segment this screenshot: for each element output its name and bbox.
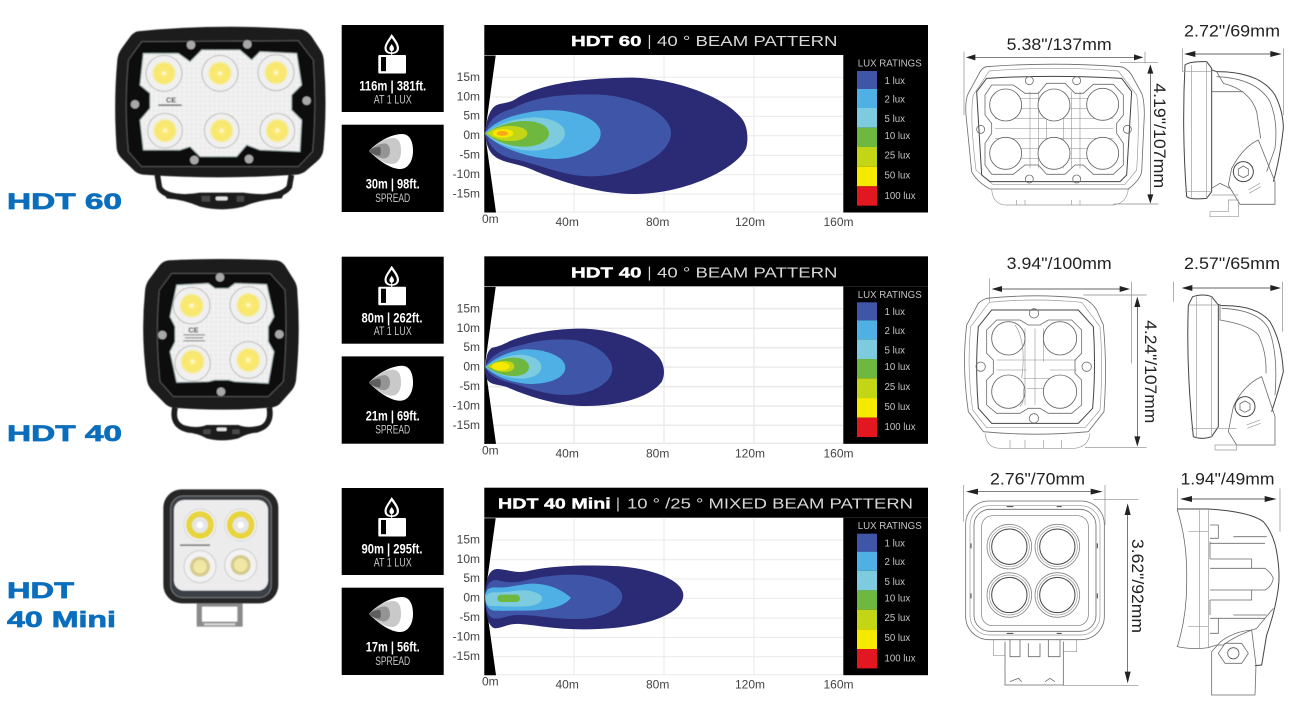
spread card: SPREAD [375,424,410,436]
distance card [342,25,444,112]
chart header: HDT 40 [571,264,642,281]
x axis labels: 160m [824,678,854,692]
dimensions: HDT 40 Mini side: 1.94"/49mm [1180,470,1274,488]
legend: lux ratings: 25 lux [884,150,910,162]
light source wedge [484,287,496,444]
spread card [342,356,444,444]
legend: lux ratings [843,286,928,444]
spread card: SPREAD [375,193,410,205]
dimensions: HDT 60 front: 5.38"/137mm [1007,35,1112,54]
spread card [342,588,444,675]
product name: HDT 60: HDT 60 [7,189,122,214]
legend: lux ratings: 1 lux [884,307,905,318]
distance card: 90m | 295ft. [362,542,422,557]
beam pattern [485,78,747,194]
chart header: HDT 40 Mini [498,495,611,512]
line drawing [965,278,1147,448]
x axis labels: 160m [824,446,854,460]
distance card: 80m | 262ft. [362,310,422,325]
y axis labels: 0m [463,359,480,373]
product name: HDT 40 Mini: HDT [7,578,75,603]
legend: lux ratings: 1 lux [884,76,905,87]
legend: lux ratings: 100 lux [884,191,916,202]
legend: lux ratings: 50 lux [884,402,910,413]
x axis labels: 80m [646,215,669,229]
x axis labels [482,443,854,460]
line drawing [964,52,1158,205]
legend: lux ratings: 100 lux [884,654,916,665]
x axis labels: 120m [735,215,765,229]
spread card: SPREAD [375,656,410,668]
line drawing [963,485,1138,686]
y axis labels: -5m [459,610,480,624]
x axis labels: 0m [482,212,499,226]
icon: spread [369,597,413,632]
legend: lux ratings: 2 lux [884,557,905,568]
beam pattern [485,565,683,629]
x axis labels: 40m [556,678,579,692]
chart header: 10 ° /25 ° MIXED BEAM PATTERN [627,495,913,512]
x axis labels: 160m [824,215,854,229]
dimensions: HDT 60 side: 2.72"/69mm [1184,22,1280,40]
icon: spread [369,366,413,401]
stats: HDT 60 [342,25,444,212]
distance card: AT 1 LUX [374,558,412,570]
dimensions: HDT 60 side [1182,22,1283,217]
dimensions: HDT 40 Mini front: 3.62"/92mm [1128,539,1147,633]
light source wedge [484,518,496,675]
y axis labels: -10m [453,398,480,412]
dimensions: HDT 60 front [964,35,1169,205]
dimensions: HDT 40 front: 3.94"/100mm [1007,254,1112,273]
x axis labels [482,675,854,692]
y axis labels [453,533,480,663]
product photo: HDT 40: CE [188,325,199,334]
distance card: 116m | 381ft. [359,79,426,94]
icon: candle [378,497,406,536]
legend: lux ratings: 50 lux [884,170,910,182]
legend: lux ratings: LUX RATINGS [858,58,922,70]
beam chart: HDT 40 [453,256,928,460]
dimensions: HDT 40 front: 4.24"/107mm [1141,320,1160,423]
x axis labels: 120m [735,678,765,692]
beam chart: HDT 40 Mini [453,488,928,692]
spread card: 30m | 98ft. [366,177,420,192]
product photo: HDT 60 [115,27,326,209]
y axis labels: -10m [453,630,480,644]
legend: lux ratings: 2 lux [884,94,905,106]
legend: lux ratings: 25 lux [884,382,910,393]
legend: lux ratings: 5 lux [884,114,905,125]
y axis labels [453,70,480,200]
y axis labels: -5m [459,379,480,393]
dimensions: HDT 40 Mini front [963,470,1147,686]
legend: lux ratings: 50 lux [884,633,910,644]
x axis labels: 80m [646,678,669,692]
legend: lux ratings: 10 lux [884,362,910,373]
chart header: 40 ° BEAM PATTERN [657,264,838,281]
chart header: | [616,495,620,512]
legend: lux ratings [843,55,928,212]
stats: HDT 40 Mini [342,488,444,675]
x axis labels: 120m [735,446,765,460]
legend: lux ratings: 1 lux [884,539,905,550]
y axis labels: 5m [463,571,480,585]
y axis labels: 5m [463,108,480,122]
spread card [342,125,444,212]
y axis labels: 15m [457,70,480,84]
legend: lux ratings [843,518,928,675]
icon: candle [378,34,406,74]
stats: HDT 40 [342,257,444,444]
dimensions: HDT 40 Mini side [1177,470,1280,695]
dimensions: HDT 60 front: 4.19"/107mm [1150,83,1169,188]
distance card [342,488,444,575]
x axis labels [482,212,854,229]
product photo: HDT 40 Mini [163,489,278,627]
y axis labels: 15m [457,533,480,547]
product photo: HDT 60: CE [166,96,176,105]
y axis labels: -15m [453,418,480,432]
chart header: 40 ° BEAM PATTERN [657,33,838,50]
y axis labels: -15m [453,649,480,663]
y axis labels: 10m [457,90,480,104]
legend: lux ratings: 10 lux [884,594,910,605]
chart header [484,488,928,518]
chart header [484,256,928,286]
x axis labels: 40m [556,215,579,229]
x axis labels: 80m [646,446,669,460]
beam pattern [485,329,664,406]
dimensions: HDT 40 side [1173,254,1283,450]
dimensions: HDT 40 Mini front: 2.76"/70mm [990,470,1085,488]
dimensions: HDT 40 side: 2.57"/65mm [1184,254,1280,273]
chart header [484,25,928,55]
line drawing [1173,282,1283,450]
legend: lux ratings: 2 lux [884,326,905,337]
x axis labels: 0m [482,675,499,689]
legend: lux ratings: 10 lux [884,131,910,142]
y axis labels: 0m [463,591,480,605]
beam chart: HDT 60 [453,25,928,229]
spread card: 17m | 56ft. [366,640,420,655]
legend: lux ratings: LUX RATINGS [858,290,922,301]
y axis labels: 5m [463,340,480,354]
line drawing [1177,488,1280,695]
distance card: AT 1 LUX [374,94,412,106]
x axis labels: 0m [482,443,499,457]
y axis labels: 15m [457,301,480,315]
icon: candle [378,266,406,305]
product photo: HDT 40 [143,259,299,440]
y axis labels: -10m [453,167,480,181]
y axis labels: 0m [463,128,480,142]
product name: HDT 40 Mini [7,578,116,632]
x axis labels: 40m [556,446,579,460]
y axis labels [453,301,480,432]
light source wedge [484,56,496,212]
y axis labels: 10m [457,552,480,566]
product name: HDT 40 Mini: 40 Mini [7,607,116,632]
y axis labels: -15m [453,186,480,200]
y axis labels: -5m [459,148,480,162]
legend: lux ratings: 5 lux [884,577,905,588]
legend: lux ratings: 100 lux [884,422,916,433]
product name: HDT 40: HDT 40 [7,421,122,446]
line drawing [1182,48,1283,217]
spread card: 21m | 69ft. [366,408,420,423]
chart header: | [648,264,651,281]
icon: spread [369,134,413,169]
legend: lux ratings: 5 lux [884,346,905,357]
legend: lux ratings: 25 lux [884,613,910,624]
dimensions: HDT 40 front [965,254,1160,448]
distance card: AT 1 LUX [374,326,412,338]
y axis labels: 10m [457,321,480,335]
chart header: | [648,33,651,50]
legend: lux ratings: LUX RATINGS [858,521,922,532]
chart header: HDT 60 [571,33,642,50]
distance card [342,257,444,344]
